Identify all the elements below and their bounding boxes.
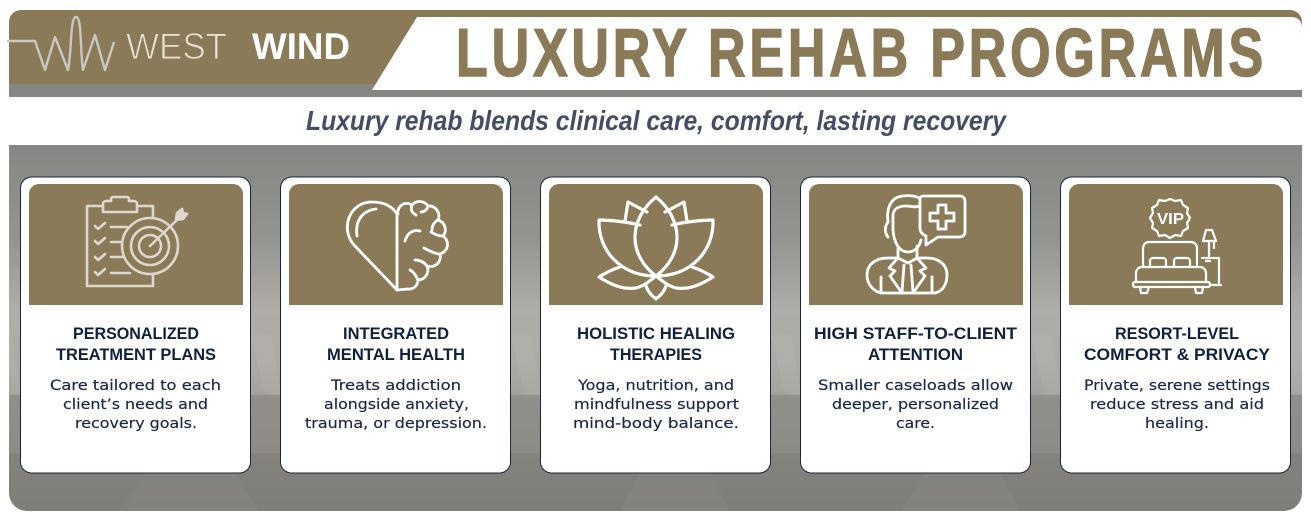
description: Care tailored to each (50, 378, 221, 394)
heading (814, 324, 1018, 364)
panel: high staff-to-client attention (800, 177, 1030, 473)
heading: THERAPIES (610, 345, 702, 364)
description: client’s needs and (63, 397, 208, 413)
logo mark (7, 17, 114, 70)
icon: doctor with speech bubble (867, 196, 965, 293)
logo word west: WEST (126, 26, 227, 67)
description: Smaller caseloads allow (818, 378, 1013, 394)
description: deeper, personalized (832, 397, 999, 413)
subtitle: Luxury rehab blends clinical care, comfort, lasting recovery (306, 105, 1007, 136)
description (573, 378, 739, 432)
heading: ATTENTION (868, 345, 963, 364)
heading: INTEGRATED (343, 324, 449, 343)
panel: integrated mental health (280, 177, 510, 473)
heading: HIGH STAFF-TO-CLIENT (814, 324, 1018, 343)
description: trauma, or depression. (305, 416, 487, 432)
description: mind-body balance. (573, 416, 739, 432)
description (818, 378, 1013, 432)
logo (7, 17, 350, 70)
description (1084, 378, 1270, 432)
background panel (9, 145, 1302, 511)
heading: MENTAL HEALTH (327, 345, 465, 364)
panel: personalized treatment plans (20, 177, 250, 473)
description: Treats addiction (330, 378, 461, 394)
description: Private, serene settings (1084, 378, 1270, 394)
description: reduce stress and aid (1090, 397, 1264, 413)
description: Yoga, nutrition, and (577, 378, 734, 394)
panel: holistic healing therapies (540, 177, 770, 473)
heading: RESORT-LEVEL (1115, 324, 1239, 343)
heading (56, 324, 216, 364)
heading: PERSONALIZED (73, 324, 199, 343)
header banner (9, 10, 1302, 97)
heading (1084, 324, 1271, 364)
logo word wind: WIND (252, 26, 350, 67)
icon: vip bed (1133, 199, 1221, 293)
description: healing. (1145, 416, 1209, 432)
description: alongside anxiety, (324, 397, 469, 413)
heading: TREATMENT PLANS (56, 345, 216, 364)
heading (577, 324, 735, 364)
icon label: vip: VIP (1157, 211, 1184, 228)
description (305, 378, 487, 432)
subtitle band (9, 97, 1302, 145)
heading: COMFORT & PRIVACY (1084, 345, 1271, 364)
description: mindfulness support (574, 397, 739, 413)
description (50, 378, 221, 432)
title background (372, 17, 1302, 90)
icon: heart and brain (347, 201, 447, 290)
heading (327, 324, 465, 364)
icon: lotus (599, 197, 713, 299)
description: recovery goals. (75, 416, 197, 432)
panel: resort-level comfort and privacy (1060, 177, 1290, 473)
icon: clipboard and target (87, 197, 187, 286)
heading: HOLISTIC HEALING (577, 324, 735, 343)
description: care. (896, 416, 935, 432)
